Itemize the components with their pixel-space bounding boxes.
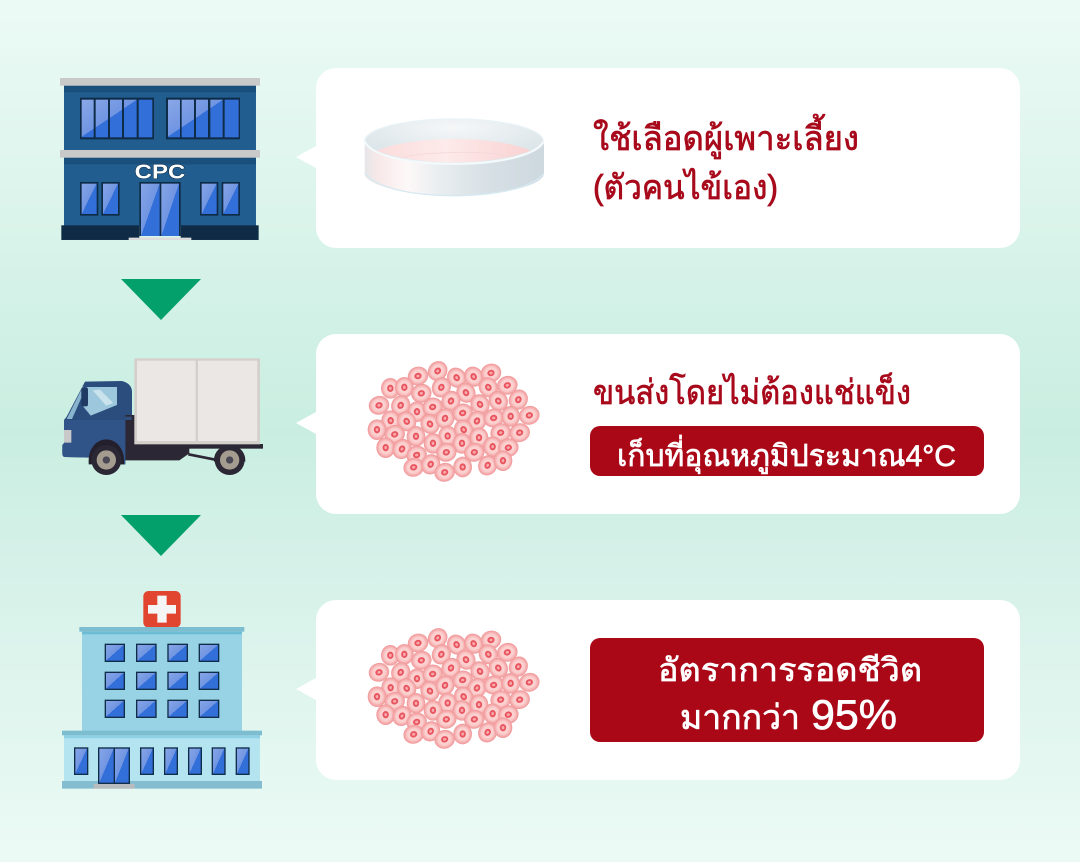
panel: transport without freezing [296, 334, 1020, 514]
icon: petri dish [365, 119, 544, 196]
icon: hospital [62, 591, 262, 789]
icon: CPC building [60, 78, 260, 240]
icon: CPC building: CPC [135, 161, 185, 183]
card 1 background with pointer [296, 68, 1020, 248]
callout: storage temperature: เก็บที่อุณหภูมิประมาณ4°C [617, 435, 956, 475]
panel: cultured with patient's blood [296, 68, 1020, 248]
callout: survival rate over 95% [590, 638, 984, 742]
heading: step 1: ใช้เลือดผู้เพาะเลี้ยง [593, 114, 859, 159]
text: step 1 sub line: (ตัวคนไข้เอง) [593, 168, 778, 207]
icon: cell cluster [366, 354, 542, 484]
heading: step 2: ขนส่งโดยไม่ต้องแช่แข็ง [593, 372, 911, 412]
icon: delivery truck [62, 358, 263, 475]
callout: storage temperature [590, 426, 984, 476]
icon: cell cluster [366, 621, 542, 751]
arrow: truck to hospital [121, 515, 201, 556]
card 3 background with pointer [296, 600, 1020, 780]
card 2 background with pointer [296, 334, 1020, 514]
callout: survival rate over 95%: 95% [811, 691, 897, 738]
arrow: CPC to truck [121, 279, 201, 320]
callout: survival rate over 95%: อัตราการรอดชีวิต [658, 652, 922, 688]
callout: survival rate over 95%: มากกว่า [680, 699, 800, 737]
panel: survival rate [296, 600, 1020, 780]
